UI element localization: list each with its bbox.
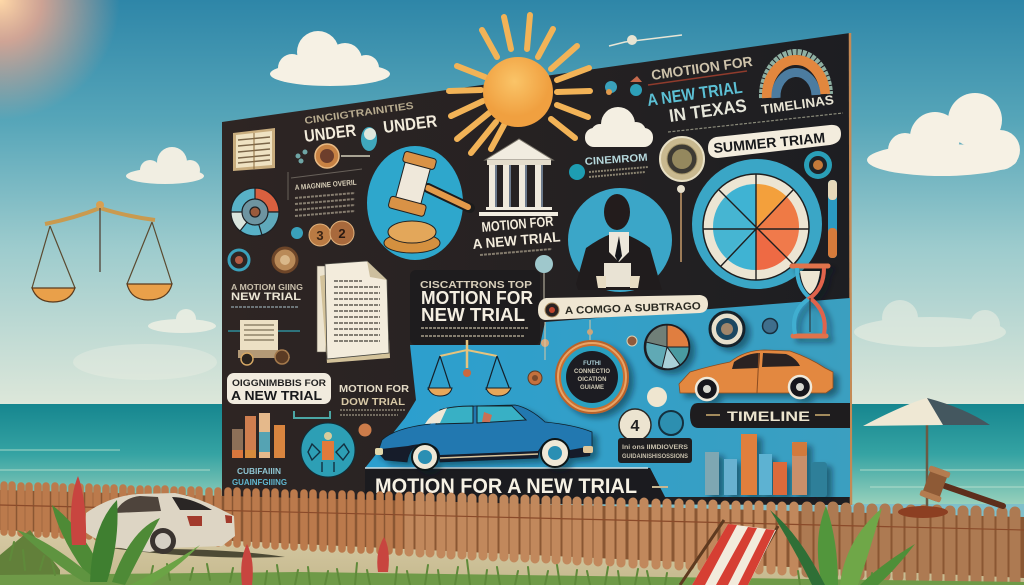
icon: white car on road [85,493,285,558]
divider: dashed line [668,113,843,132]
blue board section [365,298,850,497]
panel: circumstances motion for new trial: NEW TRIAL [421,305,525,325]
pill: a combo a subtrago: A COMGO A SUBTRAGO [565,300,701,317]
cloud: right [867,93,1020,176]
icon: red flower spike centre [241,544,253,585]
pill: circumstances for a new trial: A NEW TRIAL [231,388,322,403]
icon: blue classic car [375,405,593,470]
pill: a combo a subtrago [538,295,708,320]
icon: teal tray [294,411,330,418]
icon: courthouse [479,139,558,216]
icon: small plane [609,35,682,46]
sky background [0,0,1024,410]
panel: circumstances motion for new trial [410,270,540,345]
icon: person in blue circle [568,188,672,292]
text block: greeked paragraph: A MAGNINE OVERIL [294,178,357,192]
icon: teal badge [659,411,683,435]
icon: orange ring notice: FUTHI [583,361,601,367]
heading: motion for a new trial in Texas [646,53,753,126]
label: guidelines small [232,467,287,487]
icon: hourglass [792,266,828,336]
panel: small dark caption: Ini ons IIMDIOVERS [622,444,689,451]
icon: number 4 badge: 4 [631,418,640,435]
icon: thermometer [828,180,837,258]
icon: small ring target [804,151,832,179]
icon: number 4 badge [619,409,651,441]
panel: main motion banner [365,468,668,503]
heading: under labels [303,101,438,146]
icon: small map pins [605,76,642,96]
sun glare [0,0,120,120]
cloud: faint right [854,300,1006,347]
fence [0,485,1024,583]
label: cinemrom [584,152,648,177]
icon: round medallion [660,137,704,181]
chart: bar chart [705,434,827,497]
icon: small ring cluster [229,248,297,272]
heading: motion for a new trial in Texas: CMOTIION FOR [650,53,753,83]
heading: motion for a new trial centre: A NEW TRIAL [472,228,561,252]
icon: numbered badge 3 [309,224,331,246]
icon: balance scales on left [32,201,172,302]
icon: numbered badge 2 [330,221,354,245]
label: motion for new trial small: MOTION FOR [339,383,409,395]
heading: motion for a new trial centre [472,213,561,255]
label: cinemrom: CINEMROM [584,152,648,168]
text block: greeked paragraph [288,169,362,216]
icon: connector beads [541,320,637,360]
icon: pointer pin [677,185,685,262]
cloud: top centre [270,31,390,86]
icon: striped deck chair [680,520,778,585]
panel: small dark caption [618,438,692,463]
label: a motion giving a new trial: NEW TRIAL [231,291,301,303]
icon: red flower spike left [71,476,86,545]
icon: orange ring notice: GUIAME [580,385,604,391]
sea wave highlights [0,450,1024,487]
heading: under labels: UNDER [382,112,438,137]
panel: timeline [690,403,850,428]
icon: small dots [296,150,370,164]
pill: summer trial [708,125,841,158]
heading: motion for a new trial in Texas: IN TEXAS [668,95,748,126]
pill: summer trial: SUMMER TRIAM [713,129,826,156]
panel: circumstances motion for new trial: MOTION FOR [421,288,533,308]
label: guidelines small: GUAINFGIIING [232,478,287,487]
panel: small dark caption: GUIDAINISHISOSSIONS [622,453,689,460]
icon: copper token [528,371,542,385]
icon: timeline arc [762,52,830,98]
icon: numbered badge 3: 3 [316,228,324,243]
icon: green plant right [770,506,915,585]
icon: beach umbrella [863,398,990,506]
ground sand [0,525,1024,585]
icon: cream ball [647,387,667,407]
label: motion for new trial small: DOW TRIAL [341,396,406,408]
icon: small teal dot [291,227,303,239]
icon: white cloud on board [585,107,653,147]
chart: small pie wheel [231,188,279,236]
sea [0,404,1024,504]
cloud: faint left [73,309,217,380]
heading: under labels: CINCIIGTRAINITIES [304,101,415,127]
icon: orange ring notice [556,341,628,413]
heading: under labels: UNDER [303,121,357,146]
icon: legal paper stack [317,261,390,363]
heading: motion for a new trial centre: MOTION FOR [481,213,554,235]
icon: numbered badge 2: 2 [338,226,346,241]
cloud: left [126,147,204,184]
icon: small badge [762,318,778,334]
grass [0,530,1024,585]
panel: main motion banner: MOTION FOR A NEW TRIAL [375,474,637,498]
chart: small pie [645,325,689,369]
icon: orange ball [358,424,372,436]
icon: gavel on right [898,465,1003,518]
icon: sun with rays [449,15,590,153]
icon: orange car [679,350,833,400]
icon: books [232,413,285,458]
pill: circumstances for a new trial [227,373,331,404]
icon: scales on blue [428,340,511,396]
icon: green plant left [17,500,200,585]
label: guidelines small: CUBIFAIIIN [237,467,281,476]
pill: circumstances for a new trial: OIGGNIMBBIS FOR [232,378,327,388]
heading: motion for a new trial in Texas: A NEW TRIAL [646,78,744,110]
label: a motion giving a new trial: A MOTIOM GIING [231,283,303,292]
icon: orange ring notice: OICATION [578,377,606,383]
panel: timeline: TIMELINE [727,408,810,424]
icon: judge gavel in blue circle [367,146,470,260]
icon: teal badge circle [301,423,355,477]
board [222,33,851,505]
chart: large pie wheel [692,159,822,289]
label: a motion giving a new trial [231,283,303,307]
icon: open book [233,128,275,171]
icon: teal dot [569,164,585,180]
panel: circumstances motion for new trial: CISCATTRONS TOP [420,280,532,291]
icon: bronze medallion [315,144,339,168]
label: motion for new trial small [339,383,409,415]
icon: pendant ball [535,255,553,300]
label: timelines: TIMELINAS [760,92,835,117]
icon: red flower spike right [377,537,389,572]
icon: document cart [228,320,300,365]
icon: concentric ring [710,312,744,346]
icon: orange ring notice: CONNECTIO [574,369,610,375]
icon: blue oval [361,127,377,151]
